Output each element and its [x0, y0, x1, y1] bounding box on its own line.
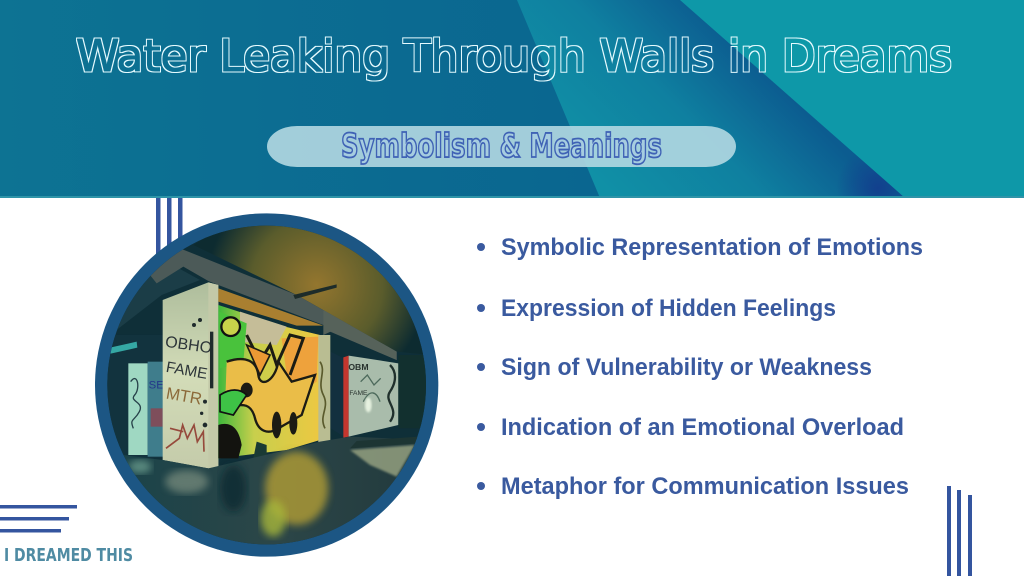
decorative top stripes: [156, 198, 182, 258]
circular photo: graffiti-covered flooded room: FAME: [165, 359, 209, 383]
decorative bottom-left stripes: [0, 505, 77, 532]
circular photo: graffiti-covered flooded room: OBM: [348, 362, 369, 372]
bullet 4: Indication of an Emotional Overload: [501, 414, 904, 441]
header banner background: [0, 0, 1024, 198]
dark doorway: [331, 352, 344, 437]
circular photo: graffiti-covered flooded room: OBHO: [164, 334, 213, 357]
bullet 3: Sign of Vulnerability or Weakness: [501, 354, 872, 381]
orange underside of beam: [218, 288, 323, 326]
subtitle pill: [267, 126, 736, 167]
wet floor: [124, 436, 416, 544]
bullet list: [477, 234, 923, 500]
circular photo: graffiti-covered flooded room: SE: [149, 379, 164, 391]
far left room: [107, 335, 124, 455]
right wall: [349, 356, 398, 437]
circular photo: graffiti-covered flooded room: FAME: [349, 390, 368, 397]
title: Water Leaking Through Walls in Dreams: [76, 31, 952, 82]
brand logo text: I DREAMED THIS: [4, 545, 133, 566]
bullet 2: Expression of Hidden Feelings: [501, 295, 836, 322]
main graffiti wall: [218, 305, 320, 458]
ceiling: [202, 226, 423, 354]
subtitle text: Symbolism & Meanings: [341, 126, 662, 165]
circular photo: graffiti-covered flooded room: MTR: [165, 384, 203, 409]
bullet 1: Symbolic Representation of Emotions: [501, 234, 923, 261]
right column: [318, 335, 330, 445]
decorative bottom-right stripes: [947, 486, 972, 576]
circular photo: graffiti-covered flooded room: [90, 213, 443, 562]
white pillar: [163, 282, 218, 468]
bullet 5: Metaphor for Communication Issues: [501, 473, 909, 500]
